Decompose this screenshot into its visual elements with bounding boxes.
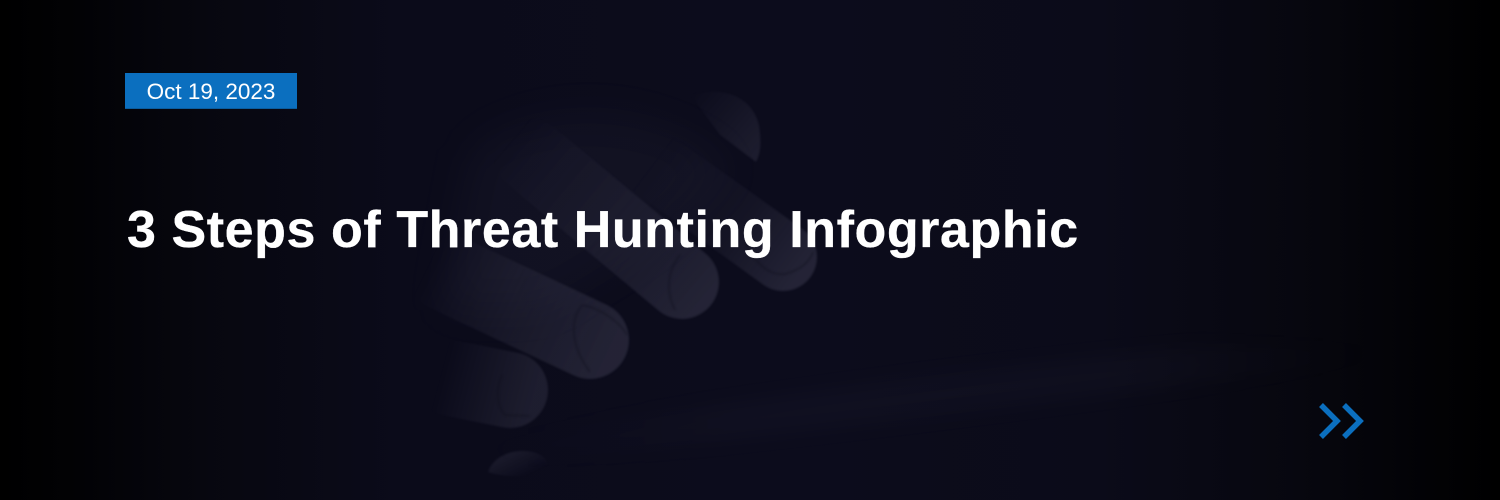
fingernails — [498, 243, 813, 416]
finger: little — [450, 378, 510, 390]
finger: lower tip — [488, 451, 554, 476]
hand shadow mass — [440, 115, 735, 310]
date badge: Oct 19, 2023 — [147, 79, 275, 104]
fingers — [445, 91, 783, 476]
finger: ring — [445, 272, 590, 340]
icon: double chevron arrow — [1319, 403, 1364, 439]
finger: far knuckle — [690, 91, 760, 162]
finger: index — [655, 165, 783, 257]
title: 3 Steps of Threat Hunting Infographic — [127, 201, 1079, 259]
finger: middle — [530, 155, 682, 282]
date badge — [125, 73, 297, 109]
keyboard edge — [470, 347, 1420, 462]
